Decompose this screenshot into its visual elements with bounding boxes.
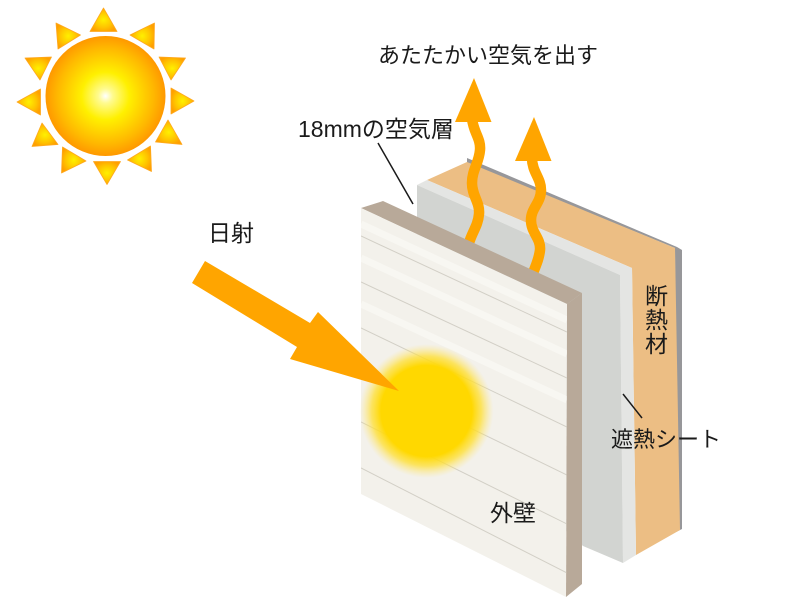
wall plank lines xyxy=(361,236,567,573)
sheet face xyxy=(417,185,623,563)
sun icon xyxy=(17,8,194,184)
label: insulation: 材 xyxy=(645,331,668,357)
sheet light edge xyxy=(417,180,636,563)
wavy arrow: warm air left xyxy=(455,78,492,243)
solar radiation arrow xyxy=(192,261,399,391)
heat shield sheet xyxy=(417,180,636,563)
insulation layer xyxy=(427,158,682,555)
leader line: air layer xyxy=(378,143,413,204)
wall wood grain xyxy=(566,317,567,400)
label: solar radiation: 日射 xyxy=(208,220,254,246)
wavy arrow: warm air right xyxy=(515,117,552,273)
insulation face xyxy=(427,162,680,555)
heat spot on wall xyxy=(360,344,494,478)
label: outer wall: 外壁 xyxy=(490,500,536,526)
label: insulation: 断 xyxy=(645,283,668,309)
label: insulation xyxy=(645,283,668,357)
label: 18mm air layer: 18mmの空気層 xyxy=(298,116,454,142)
label: warm air out: あたたかい空気を出す xyxy=(378,43,598,68)
outer wall xyxy=(361,201,582,597)
wall face xyxy=(361,208,567,597)
sun disc xyxy=(46,36,166,156)
wall top edge xyxy=(361,201,582,304)
insulation back edge xyxy=(467,158,682,532)
sun rays xyxy=(17,8,194,184)
wall side edge xyxy=(566,293,582,597)
label: insulation: 熱 xyxy=(645,307,668,333)
label: heat shield sheet: 遮熱シート xyxy=(611,427,721,452)
leader line: heat shield sheet xyxy=(623,394,642,418)
